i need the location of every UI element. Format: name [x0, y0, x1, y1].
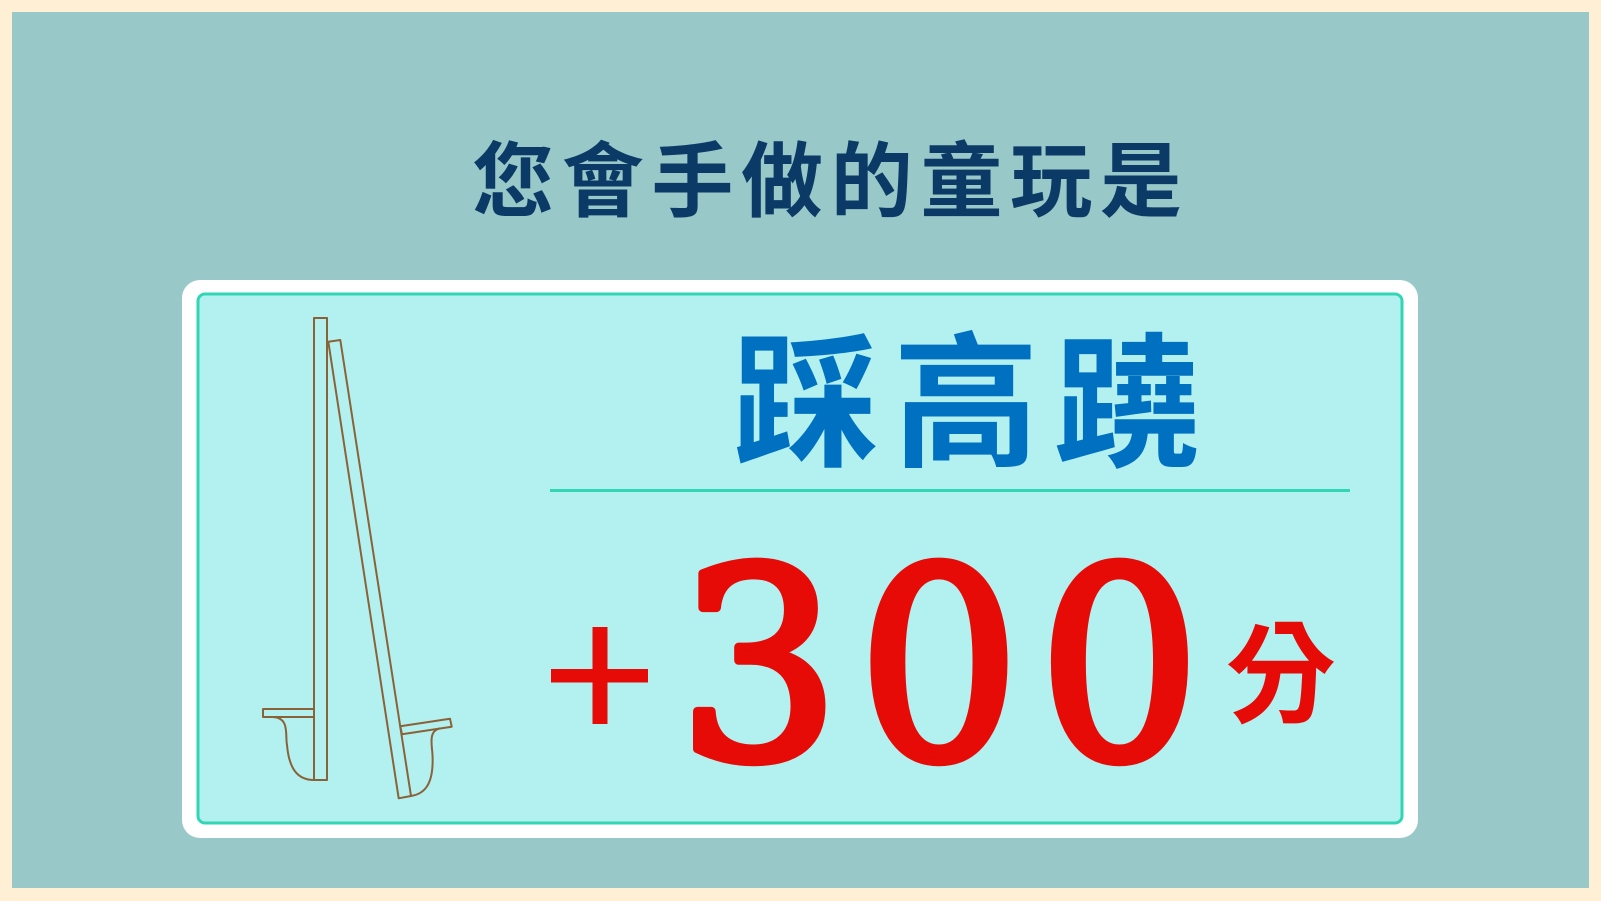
toy name: 踩高蹺 — [733, 323, 1213, 486]
divider — [550, 489, 1350, 492]
number 300 — [678, 514, 1201, 821]
unit: 分 — [1226, 615, 1336, 738]
card inner panel — [198, 294, 1402, 823]
plus sign — [551, 627, 648, 724]
panel: card — [182, 280, 1418, 838]
number 300: 3 — [678, 514, 840, 821]
number 300: 0 — [1038, 514, 1201, 821]
number 300: 0 — [858, 514, 1020, 821]
left stilt — [263, 318, 327, 780]
title: 您會手做的童玩是 — [472, 137, 1190, 228]
card white frame — [182, 280, 1418, 838]
icon: stilts — [263, 318, 452, 798]
score — [551, 514, 1336, 821]
right stilt — [328, 340, 452, 798]
